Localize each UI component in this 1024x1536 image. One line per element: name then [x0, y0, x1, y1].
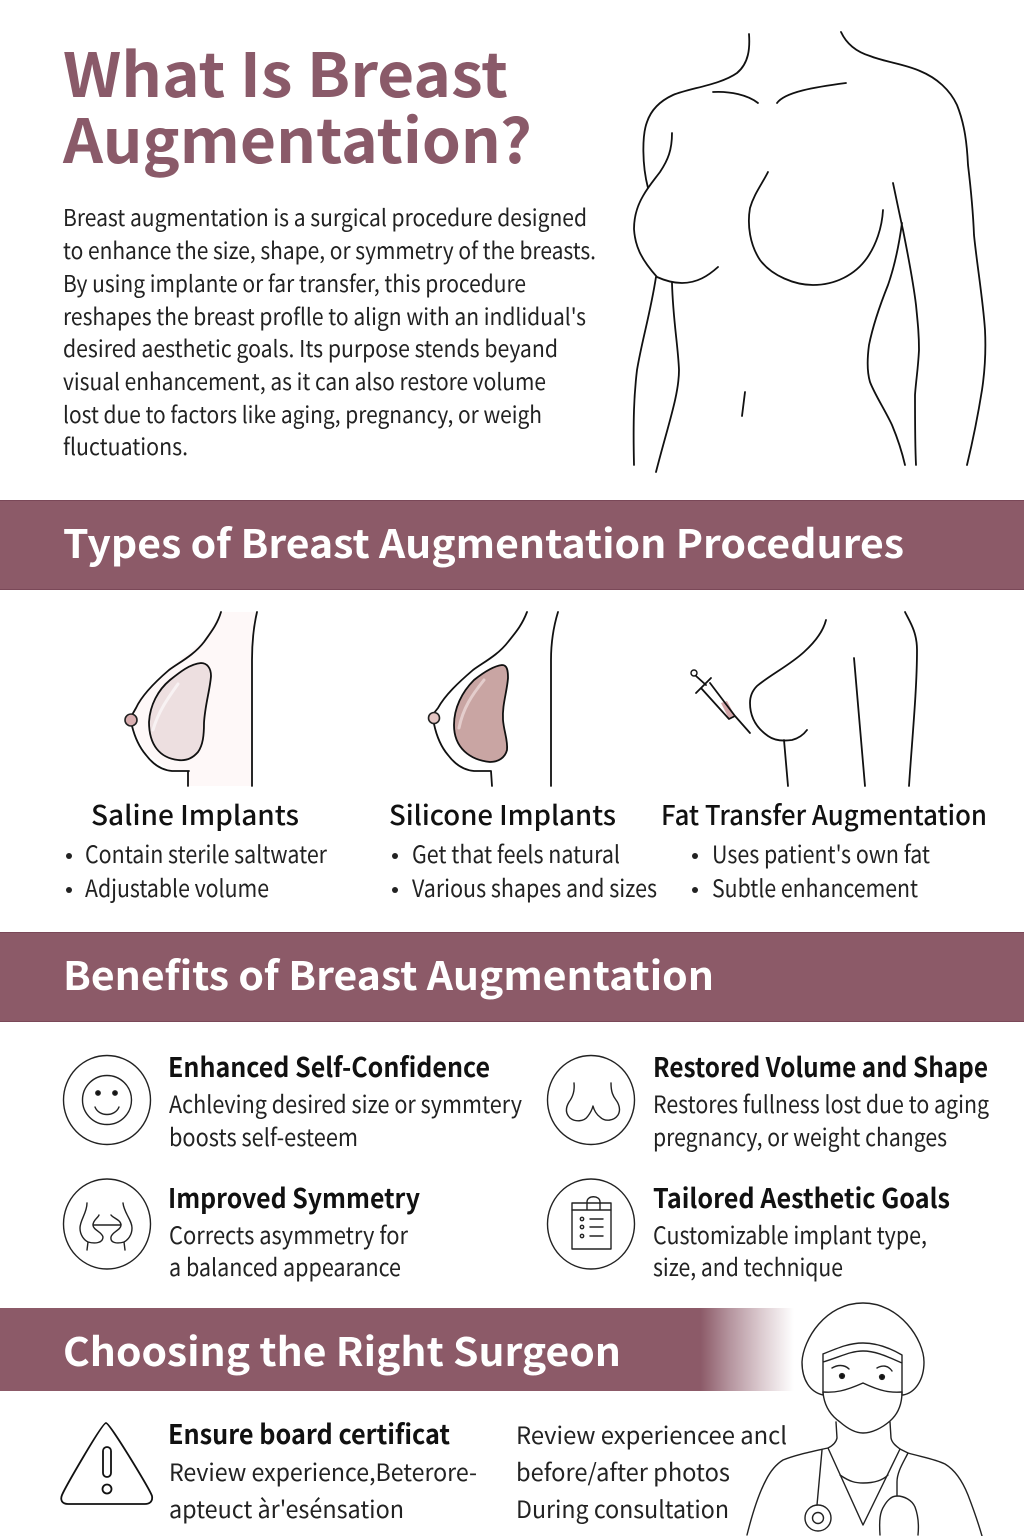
benefit: restored volume — [548, 1046, 989, 1153]
torso line illustration — [634, 32, 985, 472]
heading: saline implants: Saline Implants — [91, 794, 299, 833]
text: board certification: Ensure board certificat — [168, 1413, 450, 1452]
text: tailored goals: size, and technique — [653, 1248, 843, 1283]
heading: silicone implants: Silicone Implants — [389, 794, 616, 833]
text: review experience — [516, 1416, 787, 1525]
intro paragraph: lost due to factors like aging, pregnancy, or weigh — [63, 396, 542, 430]
panel: saline implants — [66, 612, 328, 904]
section band: choosing surgeon — [0, 1308, 810, 1391]
saline bullets — [66, 835, 328, 904]
icon: breast outline — [548, 1056, 634, 1144]
text: restored volume: Restores fullness lost due to aging — [653, 1085, 989, 1120]
silicone bullets: Various shapes and sizes — [412, 869, 657, 904]
text: board certification — [168, 1413, 477, 1525]
text: self-confidence: Achleving desired size or symmtery — [169, 1085, 522, 1120]
section band: types — [0, 500, 1024, 590]
text: self-confidence — [168, 1046, 522, 1153]
benefit: improved symmetry — [64, 1177, 420, 1283]
panel: silicone implants — [389, 612, 657, 904]
fat transfer bullets: Subtle enhancement — [712, 869, 918, 904]
silicone bullets: Get that feels natural — [412, 835, 620, 870]
section band: choosing surgeon: Choosing the Right Surgeon — [63, 1322, 621, 1378]
diagram: silicone implant — [428, 612, 558, 786]
title — [62, 26, 532, 181]
intro paragraph: By using implante or far transfer, this procedure — [63, 265, 526, 299]
text: tailored goals: Tailored Aesthetic Goals — [653, 1177, 950, 1216]
text: board certification: apteuct àr'esénsation — [169, 1490, 404, 1525]
intro paragraph: desired aesthetic goals. Its purpose stends beyand — [63, 330, 558, 364]
fat transfer bullets — [692, 835, 930, 904]
intro paragraph — [63, 199, 596, 462]
text: review experience: During consultation — [516, 1490, 729, 1525]
text: self-confidence: boosts self-esteem — [169, 1118, 358, 1153]
benefit: enhanced self-confidence — [64, 1046, 522, 1153]
fat transfer bullets: Uses patient's own fat — [712, 835, 930, 870]
icon: smiley face — [64, 1056, 150, 1144]
icon: warning triangle — [61, 1423, 152, 1504]
intro paragraph: reshapes the breast proflle to align with an indlidual's — [63, 298, 586, 332]
benefit: tailored goals — [548, 1177, 950, 1283]
text: review experience: Review experiencee ancl — [516, 1416, 787, 1451]
text: review experience: before/after photos — [516, 1453, 730, 1488]
text: tailored goals: Customizable implant type, — [653, 1216, 927, 1251]
section band: types: Types of Breast Augmentation Procedures — [63, 514, 904, 570]
text: improved symmetry — [168, 1177, 420, 1283]
text: restored volume: pregnancy, or weight changes — [653, 1118, 947, 1153]
saline bullets: Contain sterile saltwater — [85, 835, 328, 870]
illustration: surgeon — [747, 1303, 982, 1536]
icon: symmetry torso — [64, 1179, 150, 1269]
text: improved symmetry: Corrects asymmetry for — [169, 1216, 409, 1251]
section band: benefits — [0, 932, 1024, 1022]
intro paragraph: fluctuations. — [63, 428, 188, 462]
text: improved symmetry: Improved Symmetry — [168, 1177, 420, 1216]
diagram: saline implant — [125, 612, 257, 786]
intro paragraph: to enhance the size, shape, or symmetry of the breasts. — [63, 232, 596, 266]
text: improved symmetry: a balanced appearance — [169, 1248, 401, 1283]
diagram: fat transfer with syringe — [691, 612, 917, 786]
text: tailored goals — [653, 1177, 950, 1283]
text: restored volume: Restored Volume and Shape — [653, 1046, 988, 1085]
section band: benefits: Benefits of Breast Augmentation — [63, 946, 714, 1002]
text: restored volume — [653, 1046, 989, 1153]
intro paragraph: visual enhancement, as it can also restore volume — [63, 363, 546, 397]
text: board certification: Review experience,Beterore- — [169, 1453, 477, 1488]
heading: fat transfer: Fat Transfer Augmentation — [661, 794, 987, 833]
intro paragraph: Breast augmentation is a surgical procedure designed — [63, 199, 587, 233]
title: Augmentation? — [62, 92, 532, 181]
silicone bullets — [392, 835, 657, 904]
title: What Is Breast — [63, 26, 508, 115]
icon: clipboard — [548, 1179, 634, 1269]
saline bullets: Adjustable volume — [85, 869, 269, 904]
text: self-confidence: Enhanced Self-Confidence — [168, 1046, 490, 1085]
panel: fat transfer — [661, 612, 987, 904]
